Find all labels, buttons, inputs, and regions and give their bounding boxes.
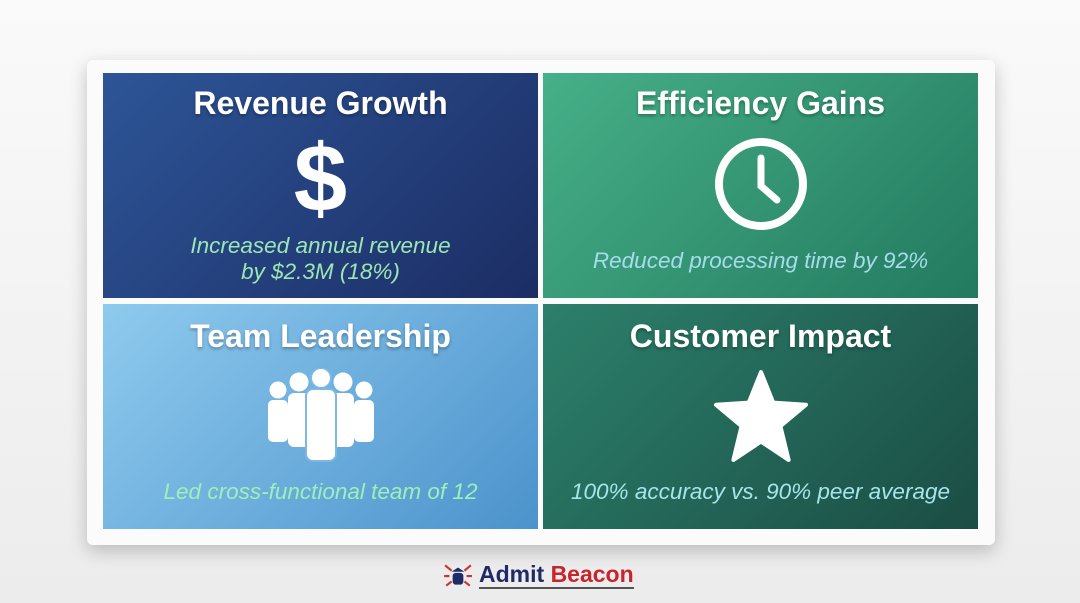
panel: efficiency gains [543,73,978,298]
icon: people [268,368,374,462]
text: efficiency: Reduced processing time by 92% [593,248,928,273]
icon: dollar: $ [294,125,347,232]
heading: customer impact: Customer Impact [630,318,891,354]
icon: star [714,370,808,462]
icon: beacon [444,564,472,586]
heading: revenue growth: Revenue Growth [193,85,448,121]
brand text: Admit Beacon [479,560,634,586]
icon: clock [715,138,807,230]
card [87,60,995,545]
text: revenue [190,233,451,284]
heading: team leadership: Team Leadership [190,318,451,354]
text: revenue: by $2.3M (18%) [241,259,400,284]
text: customer: 100% accuracy vs. 90% peer average [571,479,950,504]
text: team: Led cross-functional team of 12 [164,479,477,504]
logo: Admit Beacon [444,560,634,589]
panel: team leadership [103,304,538,529]
text: revenue: Increased annual revenue [190,233,451,258]
heading: efficiency gains: Efficiency Gains [636,85,885,121]
panel: customer impact [543,304,978,529]
panel: revenue growth [103,73,538,298]
